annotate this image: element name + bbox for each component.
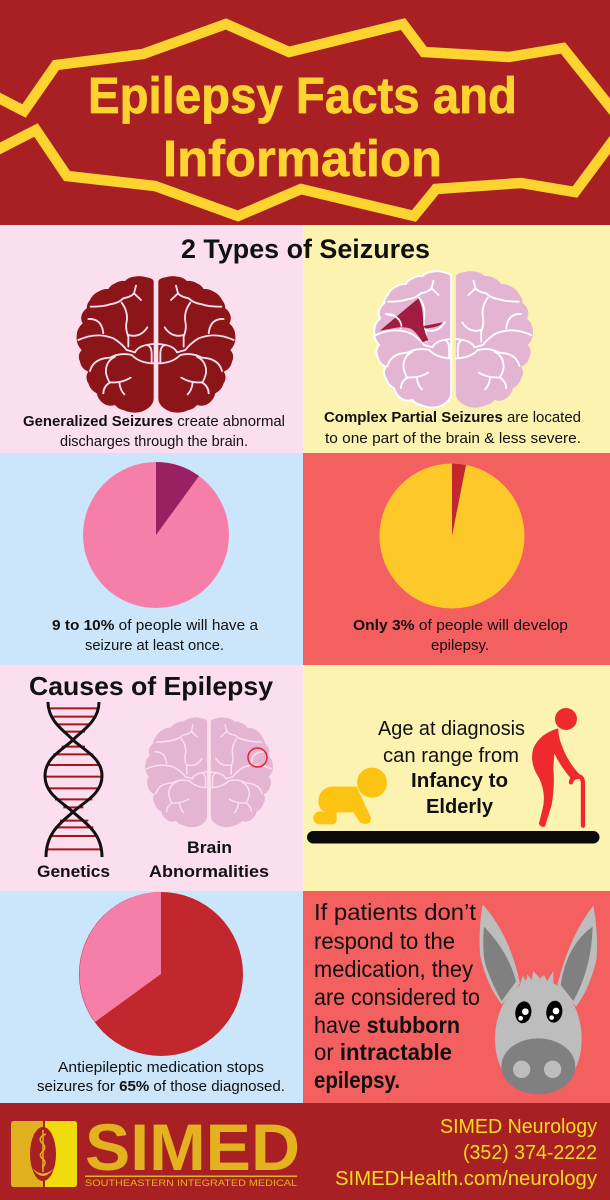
text: 3 percent: Only 3% of people will develop <box>353 618 568 634</box>
text: 3 percent <box>353 618 568 654</box>
text: stubborn epilepsy: medication, they <box>314 956 473 982</box>
contact details: (352) 374-2222 <box>463 1142 597 1164</box>
text: generalized seizures: discharges through the brain. <box>60 434 248 450</box>
text: stubborn epilepsy: If patients don’t <box>314 899 477 925</box>
text: stubborn epilepsy: have stubborn <box>314 1012 460 1038</box>
text: age at diagnosis: can range from <box>383 745 519 767</box>
contact details: SIMEDHealth.com/neurology <box>335 1168 597 1190</box>
icon: baby <box>313 768 387 824</box>
panel: stubborn epilepsy <box>303 891 610 1103</box>
logo tagline: SOUTHEASTERN INTEGRATED MEDICAL <box>85 1178 297 1189</box>
text: 9 to 10 percent <box>52 618 259 654</box>
pie chart: 10 percent <box>83 462 229 608</box>
panel: 9 to 10 percent <box>0 453 303 665</box>
title: Epilepsy Facts and <box>88 67 517 124</box>
heading: 2 types of seizures: 2 Types of Seizures <box>181 234 430 264</box>
text: generalized seizures <box>23 414 285 450</box>
title <box>88 67 517 187</box>
label: brain abnormalities <box>149 838 269 881</box>
label: brain abnormalities: Abnormalities <box>149 862 269 881</box>
text: age at diagnosis: Infancy to <box>411 770 508 792</box>
text: age at diagnosis: Age at diagnosis <box>378 718 525 740</box>
text: generalized seizures: Generalized Seizures create abnormal <box>23 414 285 430</box>
panel: causes of epilepsy <box>0 665 303 891</box>
panel: age at diagnosis <box>303 665 610 891</box>
logo: SIMED <box>11 1110 300 1189</box>
contact details <box>335 1116 597 1190</box>
icon: donkey <box>480 904 597 1094</box>
icon: pink brain with red circle <box>145 717 273 827</box>
icon: elderly person <box>532 708 583 827</box>
text: stubborn epilepsy: epilepsy. <box>314 1067 400 1093</box>
heading: causes of epilepsy: Causes of Epilepsy <box>29 671 274 701</box>
text: stubborn epilepsy: respond to the <box>314 928 455 954</box>
logo wordmark: SIMED <box>85 1110 300 1184</box>
icon: DNA helix <box>45 702 102 857</box>
pie chart: 3 percent <box>380 464 524 608</box>
panel: antiepileptic medication <box>0 891 303 1103</box>
text: antiepileptic medication <box>37 1060 285 1095</box>
text: age at diagnosis: Elderly <box>426 796 494 818</box>
text: stubborn epilepsy: or intractable <box>314 1039 452 1065</box>
icon: dark red brain <box>77 276 235 413</box>
text: complex partial seizures: Complex Partial Seizures are located <box>324 410 581 426</box>
text: 9 to 10 percent: seizure at least once. <box>85 638 224 654</box>
text: complex partial seizures <box>324 410 581 447</box>
pie chart: 65 percent <box>79 892 243 1056</box>
text: 9 to 10 percent: 9 to 10% of people will have a <box>52 618 259 634</box>
label: genetics: Genetics <box>37 862 110 881</box>
lightning frame <box>0 24 610 216</box>
ground bar <box>307 831 600 844</box>
text: 3 percent: epilepsy. <box>431 638 489 654</box>
panel: footer <box>0 1103 610 1200</box>
panel: complex partial seizures <box>303 225 610 453</box>
icon: logo badge <box>11 1121 77 1187</box>
text: antiepileptic medication: seizures for 65% of those diagnosed. <box>37 1079 285 1095</box>
panel: generalized seizures <box>0 225 303 453</box>
text: antiepileptic medication: Antiepileptic medication stops <box>58 1060 264 1076</box>
icon: partial brain <box>374 271 533 408</box>
panel: 3 percent <box>303 453 610 665</box>
text: stubborn epilepsy: are considered to <box>314 984 480 1010</box>
text: stubborn epilepsy <box>314 899 480 1093</box>
text: complex partial seizures: to one part of the brain & less severe. <box>325 431 581 447</box>
panel: header <box>0 0 610 225</box>
title: Information <box>163 130 442 187</box>
contact details: SIMED Neurology <box>440 1116 597 1138</box>
label: brain abnormalities: Brain <box>187 838 232 857</box>
text: age at diagnosis <box>378 718 525 818</box>
